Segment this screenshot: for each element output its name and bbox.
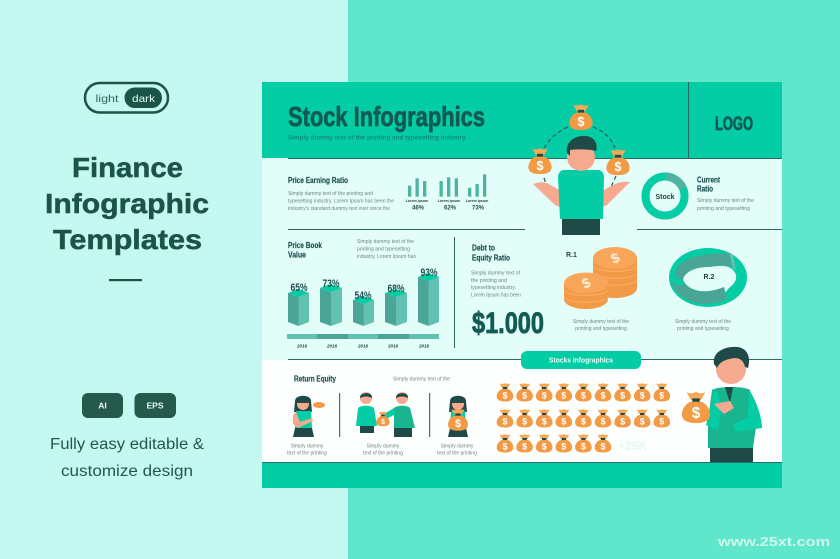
left heading: Templates bbox=[53, 224, 202, 255]
pictogram: money bag grid: $ bbox=[502, 390, 508, 400]
year strip: 2016 bbox=[387, 344, 399, 348]
year strip: 2016 bbox=[296, 344, 308, 348]
section: debt to equity ratio: the printing and bbox=[471, 278, 507, 284]
year strip: 2016 bbox=[418, 344, 430, 348]
section: current ratio donut: printing and typesetting bbox=[697, 206, 750, 212]
logo: LOGO bbox=[715, 114, 753, 135]
section: debt to equity ratio: $1.000 bbox=[472, 307, 544, 340]
section: current ratio donut: Ratio bbox=[697, 184, 713, 194]
title: Stock Infographics bbox=[288, 101, 485, 132]
chart: r.1 coin stacks: $ bbox=[579, 274, 593, 292]
section: price earning ratio: industry's standard dummy text ever since the bbox=[288, 206, 390, 212]
pictogram: money bag grid bbox=[497, 383, 670, 453]
left description: Fully easy editable & bbox=[50, 436, 205, 453]
dashed arcs bbox=[544, 126, 616, 187]
small bar charts: Lorem ipsum bbox=[466, 199, 488, 203]
pictogram: money bag grid: $ bbox=[561, 442, 566, 452]
pictogram: money bag grid: $ bbox=[600, 416, 606, 426]
section: debt to equity ratio: Lorem Ipsum has been bbox=[471, 292, 521, 298]
chart: r.2 ring: printing and typesetting bbox=[677, 326, 729, 332]
small bar charts: 62% bbox=[444, 206, 457, 212]
pictogram: money bag grid: $ bbox=[581, 390, 586, 400]
bar value labels bbox=[290, 267, 438, 302]
file format badges: EPS bbox=[146, 400, 164, 410]
chart: r.2 ring: R.2 bbox=[704, 274, 715, 281]
left heading bbox=[45, 152, 209, 255]
file format badges bbox=[82, 393, 176, 418]
illustration: two men exchanging money bag: $ bbox=[381, 417, 385, 426]
pictogram: money bag grid: $ bbox=[502, 416, 508, 426]
left heading: Infographic bbox=[45, 188, 209, 219]
chart: r.1 coin stacks bbox=[564, 247, 637, 332]
section: price book value: printing and typesetting bbox=[357, 246, 410, 252]
bar value labels: 73% bbox=[322, 278, 340, 290]
banner: stocks infographics: Stocks Infographics bbox=[549, 358, 613, 364]
money bags: $ bbox=[577, 115, 585, 129]
left heading: Finance bbox=[72, 152, 183, 183]
small bar charts: 73% bbox=[472, 206, 485, 212]
pictogram: money bag grid: $ bbox=[522, 442, 527, 452]
pictogram: money bag grid: $ bbox=[542, 390, 547, 400]
pictogram: money bag grid: $ bbox=[522, 390, 527, 400]
pictogram: money bag grid: $ bbox=[659, 416, 664, 426]
pictogram: money bag grid: $ bbox=[542, 442, 547, 452]
section: current ratio donut bbox=[646, 176, 754, 216]
banner: stocks infographics bbox=[521, 351, 641, 369]
pictogram: money bag grid: $ bbox=[581, 442, 586, 452]
toggle: light and dark: dark bbox=[132, 93, 156, 105]
section: current ratio donut: Stock bbox=[655, 194, 675, 201]
chart: r.1 coin stacks: printing and typesetting bbox=[575, 326, 627, 332]
trousers bbox=[562, 219, 600, 235]
small bar charts bbox=[406, 174, 488, 212]
pictogram: money bag grid: $ bbox=[522, 416, 527, 426]
bar value labels: 54% bbox=[354, 290, 372, 302]
captions: Simply dummy bbox=[367, 444, 400, 450]
file format badges: AI bbox=[98, 400, 107, 410]
pictogram: money bag grid: $ bbox=[561, 390, 566, 400]
year strip: 2016 bbox=[326, 344, 338, 348]
illustration: woman holding money bag bbox=[448, 396, 468, 437]
panel: infographic sheet bbox=[262, 82, 782, 488]
pictogram: money bag grid: $ bbox=[620, 390, 625, 400]
section: price earning ratio: Simply dummy text of the printing and bbox=[288, 191, 373, 197]
year strip bbox=[287, 334, 439, 348]
pictogram: money bag grid: $ bbox=[581, 416, 586, 426]
illustration: woman holding money bag: $ bbox=[455, 418, 461, 430]
illustration: two men exchanging money bag bbox=[356, 392, 415, 437]
section: return equity: Return Equity bbox=[294, 374, 336, 384]
pictogram: money bag grid: $ bbox=[542, 416, 547, 426]
section: debt to equity ratio: Equity Ratio bbox=[472, 254, 510, 262]
head bbox=[567, 143, 595, 171]
pictogram: money bag grid: $ bbox=[659, 390, 664, 400]
pictogram: money bag grid: $ bbox=[600, 442, 606, 452]
chart: r.1 coin stacks: $ bbox=[608, 249, 622, 267]
captions: text of the printing bbox=[287, 450, 327, 456]
bar value labels: 65% bbox=[290, 282, 308, 294]
captions bbox=[287, 444, 477, 456]
illustration: man juggling money bags: $ bbox=[614, 160, 622, 174]
illustration: man holding money bag bbox=[682, 347, 762, 462]
watermark: www.25xt.com bbox=[717, 534, 830, 549]
section: return equity: Simply dummy text of the bbox=[393, 376, 450, 382]
captions: Simply dummy bbox=[441, 444, 474, 450]
pictogram: money bag grid: $ bbox=[600, 390, 606, 400]
pictogram: money bag grid: $ bbox=[561, 416, 566, 426]
left description: customize design bbox=[61, 463, 193, 480]
illustration: woman holding coins bbox=[293, 396, 325, 437]
small bar charts: Lorem ipsum bbox=[406, 199, 428, 203]
illustration: man holding money bag: $ bbox=[692, 405, 701, 422]
section: price earning ratio: Price Earning Ratio bbox=[288, 176, 348, 185]
section: debt to equity ratio bbox=[471, 244, 544, 340]
section: return equity bbox=[287, 374, 477, 456]
section: current ratio donut: Current bbox=[697, 176, 720, 184]
bar value labels: 68% bbox=[388, 283, 405, 295]
section: price book value bbox=[287, 239, 439, 348]
illustration: man juggling money bags: $ bbox=[536, 159, 544, 173]
illustration: man juggling money bags bbox=[528, 104, 630, 235]
arms bbox=[533, 182, 563, 208]
section: price book value: Simply dummy text of the bbox=[357, 239, 414, 245]
captions: Simply dummy bbox=[291, 444, 324, 450]
section: price earning ratio: typesetting industry. Lorem Ipsum has been the bbox=[288, 198, 394, 204]
shirt bbox=[558, 170, 604, 219]
small bar charts: Lorem ipsum bbox=[438, 199, 460, 203]
3d bars bbox=[288, 273, 439, 326]
bar value labels: 93% bbox=[420, 267, 438, 279]
section: current ratio donut: Simply dummy text of the bbox=[697, 198, 754, 204]
small bar charts: 46% bbox=[412, 206, 425, 212]
captions: text of the printing bbox=[363, 450, 403, 456]
section: price book value: Value bbox=[288, 250, 306, 260]
pictogram: money bag grid: $ bbox=[502, 442, 508, 452]
pictogram: money bag grid: $ bbox=[640, 416, 645, 426]
year strip: 2016 bbox=[357, 344, 369, 348]
pictogram: money bag grid: $ bbox=[640, 390, 645, 400]
toggle: light and dark: light bbox=[96, 93, 119, 105]
section: price earning ratio bbox=[288, 174, 488, 212]
section: debt to equity ratio: Simply dummy text of bbox=[471, 270, 521, 276]
toggle: light and dark bbox=[85, 83, 168, 112]
section: price book value: industry. Lorem Ipsum has bbox=[357, 254, 416, 260]
chart: r.1 coin stacks: Simply dummy text of the bbox=[573, 319, 629, 325]
left description bbox=[50, 436, 205, 480]
section: debt to equity ratio: Debt to bbox=[472, 244, 495, 252]
subtitle: Simply dummy text of the printing and typesetting industry. bbox=[288, 134, 467, 142]
chart: r.2 ring bbox=[669, 248, 747, 332]
section: debt to equity ratio: typesetting industry. bbox=[471, 285, 516, 291]
pictogram: money bag grid: +25K bbox=[618, 439, 647, 453]
section: price book value: Price Book bbox=[288, 241, 322, 250]
captions: text of the printing bbox=[437, 450, 477, 456]
chart: r.1 coin stacks: R.1 bbox=[566, 252, 577, 259]
chart: r.2 ring: Simply dummy text of the bbox=[675, 319, 731, 325]
pictogram: money bag grid: $ bbox=[620, 416, 625, 426]
